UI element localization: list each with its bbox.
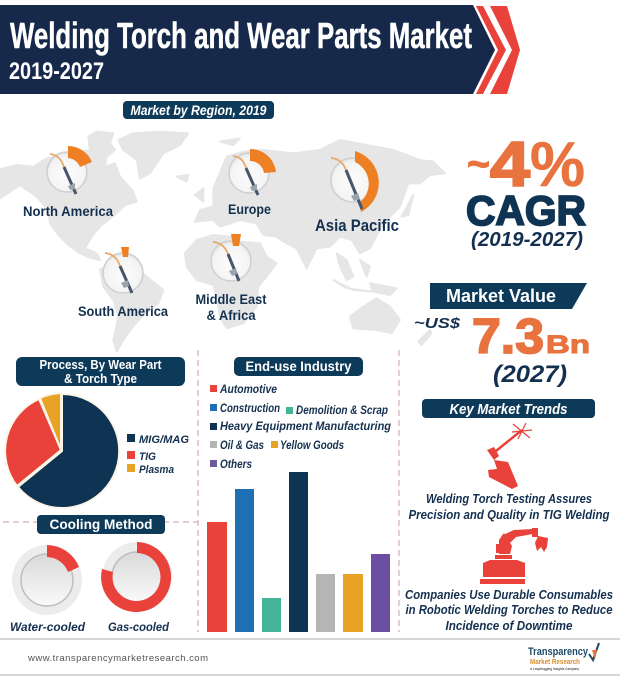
donut: Europe (229, 149, 276, 195)
donut: Asia Pacific (331, 151, 379, 212)
chevrons (476, 6, 520, 94)
CAGR stat: 4 (490, 130, 530, 200)
torch icon (50, 154, 76, 194)
section heading: market by region: Market by Region, 2019 (130, 102, 267, 118)
logo: Market Research (530, 657, 580, 666)
section heading: end-use industry: End-use Industry (246, 358, 352, 374)
bar chart legend: Yellow Goods (280, 440, 344, 452)
pie chart (5, 393, 119, 508)
logo (528, 643, 599, 671)
pie legend: Plasma (139, 464, 174, 476)
market value banner: Market Value (446, 286, 556, 306)
section heading: key market trends (422, 399, 595, 418)
torch icon (331, 158, 362, 209)
footer url: www.transparencymarketresearch.com (27, 653, 208, 664)
share arc (68, 146, 92, 167)
label: South America: South America (78, 303, 168, 319)
share arc (250, 149, 276, 173)
torch icon (105, 253, 132, 293)
section heading: process: & Torch Type (64, 371, 137, 386)
CAGR stat: (2019-2027) (471, 229, 583, 251)
label: gas-cooled: Gas-cooled (108, 620, 170, 634)
torch icon (233, 156, 258, 195)
subtitle years: 2019-2027 (9, 58, 104, 85)
CAGR stat: ~ (467, 140, 490, 187)
donut: water-cooled (12, 545, 82, 615)
icon: welding robot (480, 528, 548, 584)
share arc (231, 234, 241, 246)
donut: Middle East & Africa (211, 234, 251, 281)
bar chart legend (210, 384, 391, 471)
bar chart legend: Others (220, 459, 252, 471)
bar chart legend: Demolition & Scrap (296, 405, 388, 417)
market value figure (414, 310, 590, 388)
logo: Transparency (528, 646, 589, 658)
world map (0, 132, 445, 352)
donut: gas-cooled (101, 542, 172, 612)
footer rules (0, 638, 620, 676)
dashed section dividers (3, 350, 399, 632)
share arc (355, 151, 379, 212)
CAGR stat: % (530, 130, 585, 200)
pie legend: TIG (139, 451, 156, 463)
label: water-cooled: Water-cooled (10, 620, 86, 634)
section heading: key market trends: Key Market Trends (450, 402, 568, 418)
label: Middle East & Africa: & Africa (206, 307, 256, 323)
bar chart legend: Oil & Gas (220, 440, 264, 452)
donut: South America (103, 247, 143, 293)
label: North America: North America (23, 203, 113, 219)
header banner (0, 5, 520, 94)
market value figure: ~US$ (414, 315, 461, 332)
CAGR stat (466, 130, 586, 251)
torch icon (213, 242, 239, 281)
section heading: process (16, 357, 185, 386)
bar chart legend: Automotive (219, 384, 278, 396)
market value figure: 7.3 (472, 310, 544, 364)
bar chart legend: Construction (220, 403, 280, 415)
label: Middle East & Africa (196, 291, 267, 323)
donut: North America (47, 146, 92, 194)
section heading: cooling method (37, 515, 165, 534)
CAGR stat: CAGR (466, 187, 586, 234)
label: Europe: Europe (228, 201, 271, 217)
label: Asia Pacific: Asia Pacific (315, 216, 399, 235)
pie legend (127, 434, 189, 476)
section heading: process: Process, By Wear Part (40, 357, 162, 372)
trend text 2 (405, 588, 613, 633)
bar chart legend: Heavy Equipment Manufacturing (220, 421, 391, 433)
logo: A Leapfrogging Insights Company (530, 666, 580, 671)
pie legend: MIG/MAG (139, 434, 189, 446)
section heading: cooling method: Cooling Method (50, 516, 152, 532)
label: Middle East & Africa: Middle East (196, 291, 267, 307)
trend text 1: Welding Torch Testing Assures (426, 492, 592, 506)
market value figure: (2027) (493, 361, 567, 388)
icon: welding torch (487, 423, 532, 489)
trend text 2: Incidence of Downtime (446, 619, 573, 633)
share arc (121, 247, 129, 257)
market value banner (430, 283, 587, 309)
trend text 1 (408, 492, 610, 522)
market value figure: Bn (546, 331, 590, 359)
bar chart (207, 472, 390, 632)
